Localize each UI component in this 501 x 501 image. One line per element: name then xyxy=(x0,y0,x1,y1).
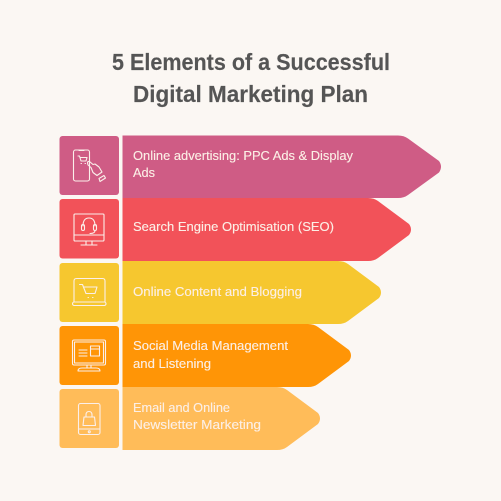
arrow: online advertising: Online advertising: PPC Ads & Display xyxy=(133,149,354,163)
arrow: email and newsletter: Newsletter Marketing xyxy=(133,418,261,432)
title: Digital Marketing Plan xyxy=(133,81,368,107)
arrow: online content xyxy=(122,261,381,324)
arrow: email and newsletter: Email and Online xyxy=(133,401,230,415)
icon tile: laptop cart xyxy=(60,263,119,322)
icon tile: tablet shopping bag xyxy=(60,389,119,448)
title xyxy=(112,49,390,107)
arrow: seo: Search Engine Optimisation (SEO) xyxy=(133,220,334,234)
icon tile: headset monitor xyxy=(60,199,119,258)
arrow: online advertising xyxy=(122,136,441,198)
arrow: seo xyxy=(122,198,411,261)
title: 5 Elements of a Successful xyxy=(112,49,390,75)
arrow: email and newsletter xyxy=(122,387,320,450)
icon tile: desktop social media xyxy=(60,326,119,385)
arrow: online content: Online Content and Blogging xyxy=(133,285,302,299)
arrow: social media: and Listening xyxy=(133,357,211,371)
arrow: social media: Social Media Management xyxy=(133,339,289,353)
icon tile: phone shopping xyxy=(60,136,119,195)
arrow: social media xyxy=(122,324,351,387)
arrow: online advertising: Ads xyxy=(133,166,155,180)
